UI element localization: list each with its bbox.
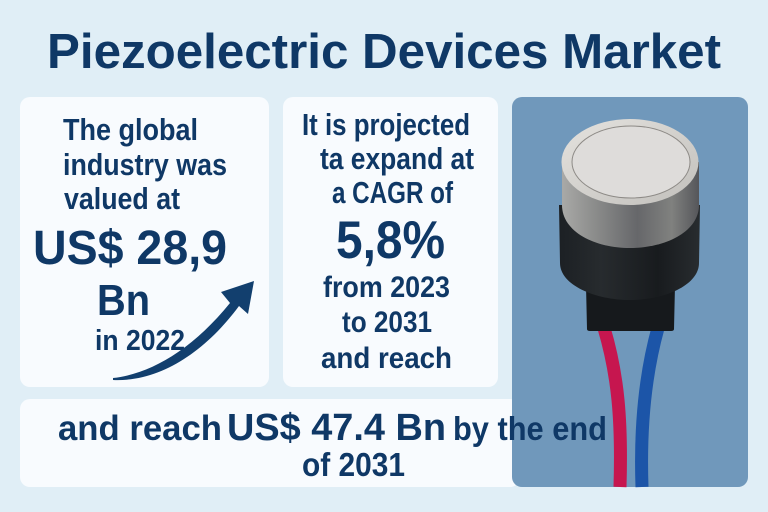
red wire [604, 328, 620, 487]
blue wire [642, 328, 658, 487]
value: US$ 28,9 Bn: Bn [97, 276, 150, 325]
intro text [63, 112, 227, 216]
metal body [562, 162, 699, 248]
period text: and reach [321, 342, 452, 375]
title: Piezoelectric Devices Market [47, 25, 721, 79]
black housing [559, 205, 700, 300]
period text: to 2031 [342, 306, 432, 339]
intro text: The global [63, 112, 198, 147]
intro text: industry was [63, 147, 227, 182]
forecast text: of 2031 [302, 446, 405, 483]
panel: 2031 forecast background [20, 399, 520, 487]
connector [586, 285, 675, 331]
value: US$ 28,9 Bn: US$ 28,9 [33, 222, 227, 275]
year label: in 2022 [95, 325, 185, 357]
card background [20, 97, 269, 387]
intro text: valued at [64, 181, 180, 216]
forecast text: and reach [58, 409, 222, 448]
top disc [572, 126, 690, 198]
value: 5,8%: 5,8% [336, 211, 445, 270]
intro text: It is projected [302, 107, 470, 142]
panel: product photo [512, 97, 748, 487]
intro text: ta expand at [320, 141, 474, 176]
period text: from 2023 [323, 271, 450, 304]
intro text: a CAGR of [332, 175, 454, 210]
icon: rising arrow [113, 281, 254, 380]
forecast text [58, 407, 607, 483]
forecast text: US$ 47.4 Bn [227, 407, 446, 449]
period text [321, 271, 452, 375]
panel: market value 2022 [20, 97, 269, 387]
intro text [302, 107, 474, 210]
card background [283, 97, 498, 387]
top rim [562, 119, 698, 205]
forecast text: by the end [453, 410, 607, 447]
photo background [512, 97, 748, 487]
value: US$ 28,9 Bn [33, 222, 227, 325]
panel: projected CAGR [283, 97, 498, 387]
